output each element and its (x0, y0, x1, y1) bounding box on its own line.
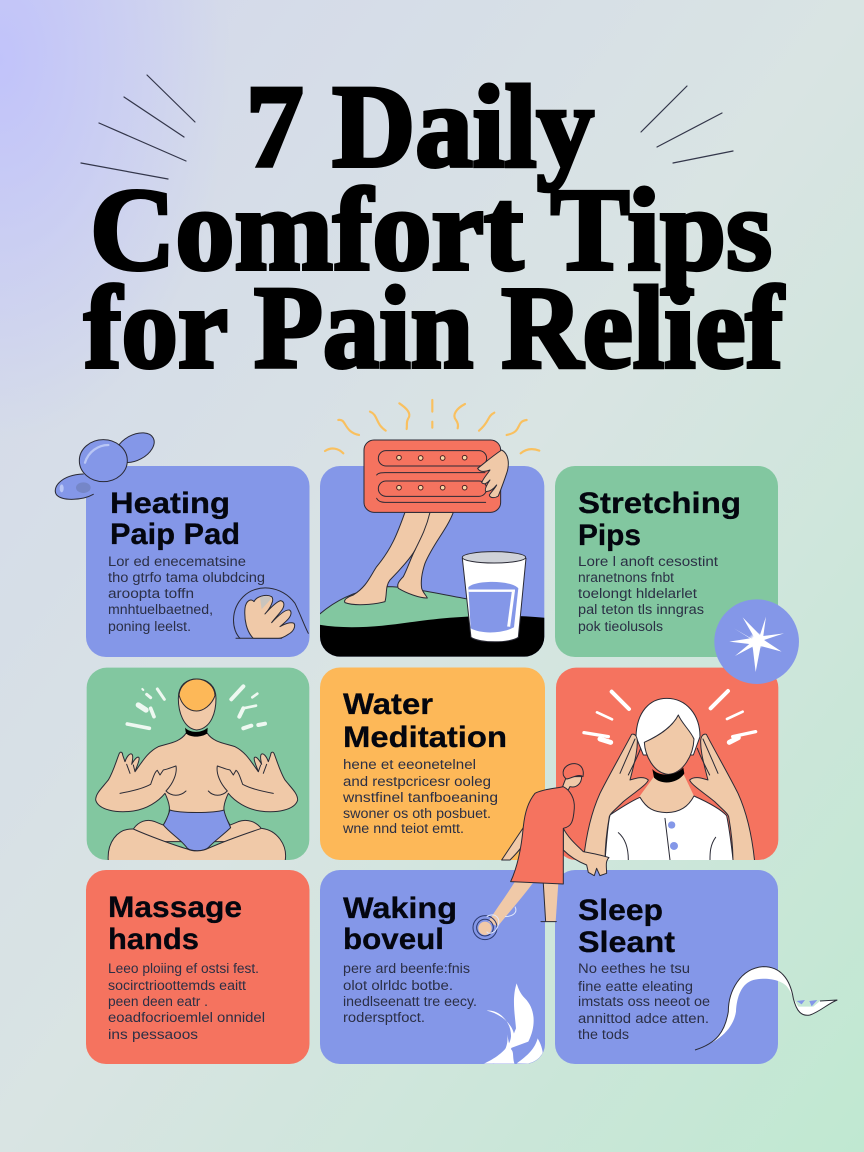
text: massage hands body: Leeo ploiing ef ostsi fest. (108, 961, 259, 976)
left arm and hand (583, 734, 648, 862)
icon: heating pad (364, 440, 501, 512)
text: massage hands body: socirctrioottemds eaitt (108, 978, 246, 993)
text: waking boveul body: olot olrldc botbe. (343, 978, 453, 993)
text: stretching pips body: pal teton tls inngras (578, 602, 704, 617)
text: sleep sleant body: annittod adce atten. (578, 1011, 709, 1026)
text: sleep sleant body: the tods (578, 1027, 629, 1042)
text: heating pain pad body: aroopta toffn (108, 586, 194, 601)
title (84, 61, 785, 393)
icon: water glass (462, 552, 526, 642)
reaching arm and hand (563, 828, 609, 876)
text: sleep sleant body: imstats oss neeot oe (578, 994, 710, 1009)
hair (636, 698, 700, 755)
white motion marks (127, 686, 265, 728)
text: stretching pips body (578, 554, 718, 634)
heading: stretching pips (578, 487, 741, 552)
icon: sparkle badge (714, 599, 799, 684)
text: massage hands body (108, 961, 265, 1042)
left arm details (120, 764, 186, 795)
icon: right burst lines (641, 86, 733, 163)
collar (185, 728, 208, 737)
icon: white flame (481, 983, 543, 1065)
text: water meditation body: hene et eeonetelnel (343, 757, 476, 772)
text: waking boveul body (343, 961, 477, 1025)
heading: waking boveul: boveul (343, 923, 444, 956)
legs (345, 512, 453, 605)
shirt (605, 796, 733, 862)
torso right half (197, 733, 298, 825)
heading: waking boveul: Waking (343, 892, 457, 925)
text: stretching pips body: nranetnons fnbt (578, 570, 674, 585)
heading: sleep sleant (578, 894, 675, 959)
near leg (543, 883, 558, 922)
panel: waking boveul (320, 870, 545, 1064)
hair (563, 764, 583, 779)
neck (639, 775, 694, 814)
right arm and hand (690, 734, 755, 862)
knees (133, 820, 262, 842)
heading: water meditation: Meditation (343, 721, 507, 754)
panel: heating pad and water illustration (317, 400, 550, 660)
text: sleep sleant body: No eethes he tsu (578, 961, 690, 976)
heading: massage hands: hands (108, 923, 199, 956)
heading: heating pain pad: Heating (110, 487, 230, 520)
shirt buttons (668, 821, 678, 850)
head (178, 679, 216, 730)
text: heating pain pad body: Lor ed enecematsine (108, 554, 246, 569)
icon: left burst lines (81, 75, 195, 179)
far arm (502, 827, 527, 860)
heat waves (325, 400, 539, 453)
neck and face (561, 777, 582, 793)
title: 7 Daily (246, 61, 594, 192)
torso left half (96, 733, 197, 825)
text: massage hands body: ins pessaoos (108, 1027, 198, 1042)
heading: water meditation: Water (343, 688, 433, 721)
heading: sleep sleant: Sleant (578, 926, 675, 959)
panel: meditation figure (87, 668, 309, 862)
face (644, 715, 694, 774)
text: water meditation body: swoner os oth posbuet. (343, 806, 491, 821)
shorts (163, 810, 231, 851)
text: stretching pips body: pok tieolusols (578, 619, 663, 634)
icon: white wave ribbon (695, 967, 837, 1050)
text: stretching pips body: toelongt hldelarlet (578, 586, 697, 601)
text: water meditation body (342, 757, 498, 836)
green hill (317, 587, 470, 630)
text: stretching pips body: Lore l anoft cesostint (578, 554, 718, 569)
text: heating pain pad body: poning leelst. (108, 619, 191, 634)
text: waking boveul body: pere ard beenfe:fnis (343, 961, 470, 976)
panel: sleep sleant (555, 870, 778, 1064)
heading: heating pain pad (110, 487, 240, 551)
dress (511, 787, 574, 884)
heading: stretching pips: Stretching (578, 487, 741, 520)
panel: headache woman (556, 668, 778, 862)
heading: massage hands (108, 891, 242, 956)
title: for Pain Relief (84, 262, 785, 393)
text: sleep sleant body: fine eatte eleating (578, 979, 693, 994)
icon: hand on pad (478, 450, 508, 498)
text: waking boveul body: inedlseenatt tre eecy. (343, 994, 477, 1009)
panel: heating pain pad (86, 466, 310, 657)
crossed legs (108, 828, 286, 862)
text: heating pain pad body: mnhtuelbaetned, (108, 602, 213, 617)
collar (652, 768, 684, 782)
text: water meditation body: wne nnd teiot emtt. (342, 821, 464, 836)
icon: walking figure (473, 764, 609, 940)
heading: massage hands: Massage (108, 891, 242, 924)
text: water meditation body: and restpcricesr ooleg (343, 774, 491, 789)
text: heating pain pad body: tho gtrfo tama olubdcing (108, 570, 265, 585)
text: heating pain pad body (108, 554, 265, 634)
icon: capsules (55, 427, 159, 499)
heading: waking boveul (343, 892, 457, 956)
panel: massage hands (86, 870, 310, 1064)
text: massage hands body: peen deen eatr . (108, 994, 208, 1009)
heading: heating pain pad: Paip Pad (110, 518, 240, 551)
text: sleep sleant body (578, 961, 710, 1042)
title: Comfort Tips (90, 164, 772, 295)
right arm details (208, 764, 273, 795)
text: massage hands body: eoadfocrioemlel onnidel (108, 1010, 265, 1025)
heading: sleep sleant: Sleep (578, 894, 663, 927)
black ground (320, 616, 544, 657)
ankle rings (473, 907, 516, 940)
hair (179, 679, 215, 711)
panel: stretching pips (555, 466, 778, 657)
heading: stretching pips: Pips (578, 519, 641, 552)
icon: hand in circle (234, 588, 308, 638)
text: waking boveul body: rodersptfoct. (343, 1010, 425, 1025)
text: water meditation body: wnstfinel tanfboeaning (342, 790, 498, 805)
heading: water meditation (343, 688, 507, 754)
stride leg (488, 882, 534, 927)
white pain rays (584, 691, 756, 742)
panel: water meditation (320, 668, 545, 860)
